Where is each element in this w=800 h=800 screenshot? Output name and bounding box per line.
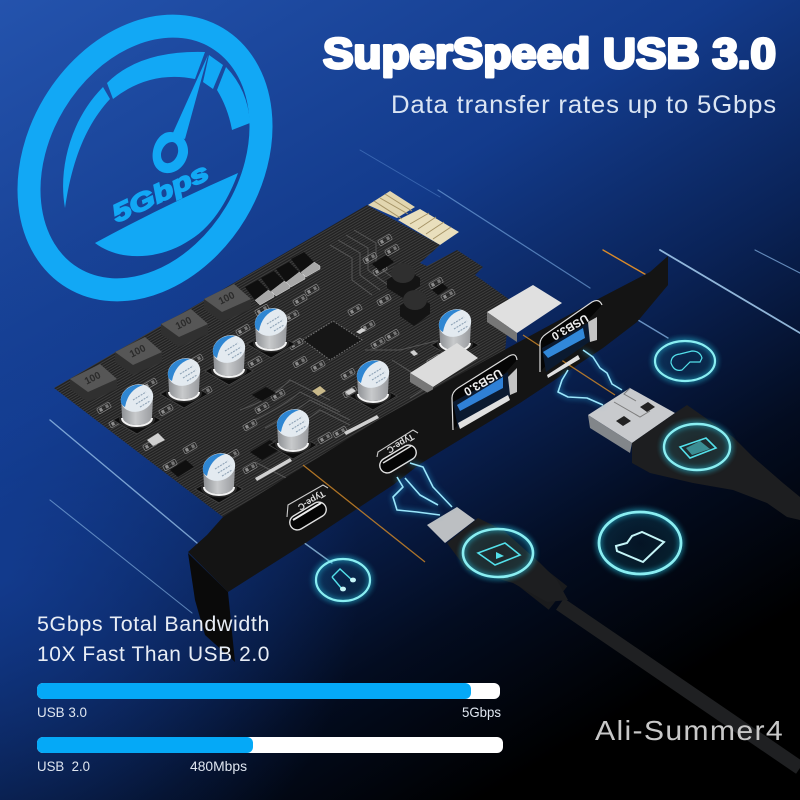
gauge needle xyxy=(172,55,208,139)
usb 3.0 port label: USB3.0 xyxy=(461,366,505,399)
type-c cable xyxy=(427,507,800,768)
title: SuperSpeed USB 3.0 xyxy=(323,30,776,78)
capacitors xyxy=(113,304,479,503)
bandwidth heading xyxy=(37,613,270,666)
5gbps value: 5Gbps xyxy=(462,704,501,720)
icon: folder circle xyxy=(590,503,690,583)
cable strain relief xyxy=(525,572,558,598)
metal bracket xyxy=(188,256,668,592)
type-c port right xyxy=(377,430,419,476)
gauge 5Gbps label: 5Gbps xyxy=(107,158,213,228)
gauge hub xyxy=(153,132,188,173)
lightning arcs xyxy=(393,350,622,515)
orange highlight lines xyxy=(303,335,615,562)
usb 2.0 speed bar xyxy=(37,737,503,774)
usb 3.0 port right xyxy=(540,301,602,378)
gold connector fingers xyxy=(368,191,459,245)
pci card xyxy=(54,191,668,662)
black smd parts xyxy=(170,255,448,477)
gauge lower crescent xyxy=(95,173,238,256)
usb 2.0 label: USB 2.0 xyxy=(37,758,90,774)
bandwidth heading: 10X Fast Than USB 2.0 xyxy=(37,643,270,666)
bandwidth heading: 5Gbps Total Bandwidth xyxy=(37,613,270,636)
icon: game controller circle xyxy=(647,333,723,389)
board traces xyxy=(240,230,440,480)
subtitle: Data transfer rates up to 5Gbps xyxy=(391,91,777,119)
icon: music note circle xyxy=(307,552,379,608)
board white components xyxy=(147,328,418,481)
cable run xyxy=(560,604,800,768)
type-c overmold xyxy=(447,518,568,602)
circuit board xyxy=(54,205,510,517)
usb 3.0 port label: USB3.0 xyxy=(549,311,590,342)
usb 3.0 port left xyxy=(452,355,517,430)
gauge outer ring xyxy=(0,0,308,333)
gauge arc segments xyxy=(63,52,250,208)
type-c metal plug xyxy=(427,507,475,543)
mosfets xyxy=(245,252,320,305)
usb 3.0 label: USB 3.0 xyxy=(37,704,87,720)
watermark: Ali-Summer4 xyxy=(595,715,784,746)
icon: image circle xyxy=(656,416,738,478)
round inductors xyxy=(387,263,430,326)
type-c port label: Type-C xyxy=(296,489,327,513)
480mbps value: 480Mbps xyxy=(190,758,247,774)
board pads xyxy=(96,234,456,474)
icon: speedometer gauge xyxy=(0,0,308,333)
inductors xyxy=(70,284,251,402)
type-c port left xyxy=(287,485,329,533)
type-c port label: Type-C xyxy=(385,432,416,456)
usb-a overmold xyxy=(632,405,800,520)
usb-a metal plug xyxy=(588,388,675,453)
usb-a cable xyxy=(588,388,800,520)
usb port shields xyxy=(410,285,562,396)
icon: video circle xyxy=(456,522,540,584)
bracket tail xyxy=(188,553,235,662)
background light lines xyxy=(50,150,800,613)
controller chip xyxy=(303,321,362,360)
usb 3.0 speed bar xyxy=(37,683,501,720)
